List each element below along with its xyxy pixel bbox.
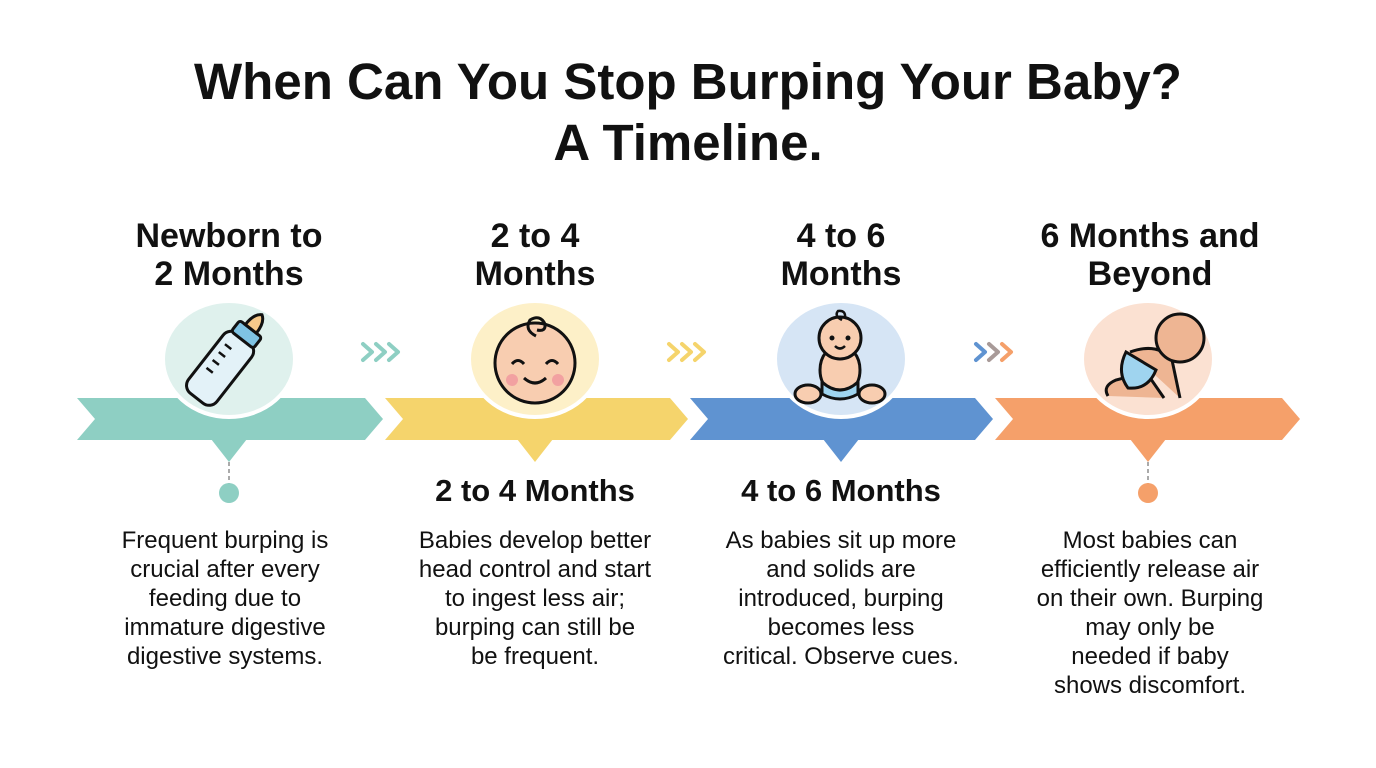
text: stage 3: introduced, burping [738, 585, 944, 612]
chevron arrows [363, 344, 1011, 360]
title: A Timeline. [553, 114, 823, 171]
stage headings: 2 to 4 [491, 217, 579, 255]
text: stage 1: Frequent burping is [122, 527, 328, 554]
stage headings: Beyond [1088, 255, 1212, 293]
text: stage 1: digestive systems. [127, 643, 323, 670]
text: stage 3: critical. Observe cues. [723, 643, 959, 670]
title: When Can You Stop Burping Your Baby? [194, 53, 1182, 110]
text: stage 4: efficiently release air [1041, 556, 1259, 583]
text: stage 2: burping can still be [435, 614, 635, 641]
text: stage 2 [419, 527, 651, 670]
subheadings: 4 to 6 Months [741, 473, 941, 508]
text: stage 2: to ingest less air; [445, 585, 625, 612]
text: stage 2: be frequent. [471, 643, 599, 670]
stage headings: 4 to 6 [797, 217, 885, 255]
timeline band [77, 398, 1300, 462]
text: stage 2: head control and start [419, 556, 651, 583]
subheadings: 2 to 4 Months [435, 473, 635, 508]
text: stage 4: on their own. Burping [1037, 585, 1263, 612]
stage headings: Newborn to [136, 217, 322, 255]
text: stage 1: immature digestive [124, 614, 326, 641]
text: stage 3: As babies sit up more [726, 527, 956, 554]
text: stage 1: crucial after every [130, 556, 320, 583]
stage headings: Months [781, 255, 901, 293]
stage headings: Months [475, 255, 595, 293]
stage headings [136, 217, 1260, 293]
text: stage 1 [122, 527, 328, 670]
text: stage 4: needed if baby [1071, 643, 1229, 670]
text: stage 2: Babies develop better [419, 527, 651, 554]
markers: dashed lines and dots [219, 462, 1158, 503]
text: stage 4: shows discomfort. [1054, 672, 1246, 699]
icon: crawling baby [1082, 301, 1214, 417]
text: stage 3 [723, 527, 959, 670]
title [194, 53, 1182, 171]
text: stage 4: Most babies can [1063, 527, 1237, 554]
subheadings [435, 473, 941, 508]
stage headings: 6 Months and [1040, 217, 1260, 255]
text: stage 4 [1037, 527, 1263, 699]
icon: baby face [469, 301, 601, 417]
icon: bottle [163, 301, 295, 417]
text: stage 4: may only be [1085, 614, 1215, 641]
text: stage 1: feeding due to [149, 585, 301, 612]
stage headings: 2 Months [154, 255, 304, 293]
text: stage 3: and solids are [766, 556, 916, 583]
icon: sitting baby [775, 301, 907, 417]
text: stage 3: becomes less [768, 614, 914, 641]
